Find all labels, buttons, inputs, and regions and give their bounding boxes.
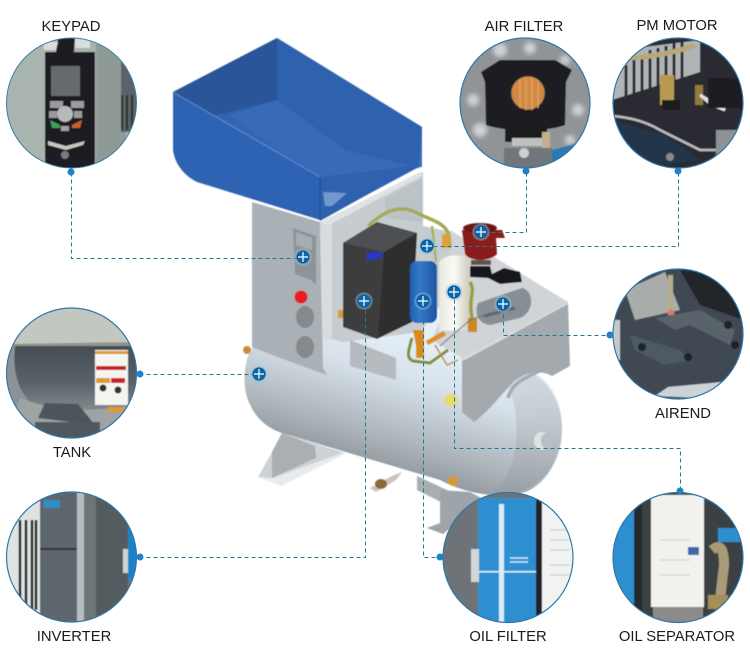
right foot: [417, 476, 485, 534]
red stop button: [294, 290, 308, 304]
tank connector dot: [136, 370, 144, 378]
keypad recess: [293, 228, 316, 285]
white oil separator: [439, 255, 469, 331]
hinge bar: [321, 172, 422, 226]
tank body: [245, 300, 562, 495]
blue top hood: [173, 38, 422, 221]
control cabinet left panel: [252, 202, 327, 375]
air filter label: AIR FILTER: [485, 19, 563, 35]
panel: tank: [6, 308, 144, 461]
keypad label: KEYPAD: [42, 19, 100, 35]
air filter housing red: [462, 223, 505, 265]
machine deck: [432, 230, 568, 358]
cabinet side panel: [320, 172, 451, 342]
left foot: [258, 433, 345, 486]
keypad photo: [6, 38, 137, 176]
panel: inverter: [6, 492, 144, 645]
air filter photo: [460, 38, 591, 174]
oil separator connector dot: [676, 488, 684, 494]
panel: air filter: [460, 19, 591, 174]
inverter photo: [6, 492, 144, 623]
yellow cap: [444, 394, 458, 406]
airend connector dot: [606, 332, 614, 338]
keypad connector dot: [68, 168, 74, 176]
air compressor illustration: [173, 38, 570, 534]
airend photo: [606, 268, 744, 400]
panel: oil filter: [436, 492, 574, 645]
PM motor photo: [612, 38, 744, 174]
inverter label: INVERTER: [37, 629, 111, 645]
inverter connector dot: [136, 554, 144, 560]
connector lines: [72, 172, 680, 558]
grey panel buttons: [296, 306, 314, 358]
black motor parts: [470, 266, 522, 284]
tank right end cap: [490, 366, 562, 495]
oil separator photo: [612, 488, 744, 623]
right front guard plate: [462, 302, 570, 422]
panel: keypad: [6, 19, 137, 176]
airend label: AIREND: [655, 406, 711, 422]
hotspot markers: [250, 223, 512, 383]
PM motor label: PM MOTOR: [636, 18, 718, 34]
tank handle: [508, 366, 550, 398]
oil separator label: OIL SEPARATOR: [619, 629, 735, 645]
lower shroud: [350, 340, 396, 380]
panel: airend: [606, 268, 744, 422]
panel: PM motor: [612, 18, 744, 174]
panel: oil separator: [612, 488, 744, 645]
orange fittings and pipes: [338, 310, 458, 365]
tank end port: [534, 432, 553, 450]
PM motor connector dot: [674, 168, 682, 174]
green pipe: [368, 209, 450, 248]
inverter box: [343, 222, 417, 339]
oil filter photo: [436, 492, 574, 623]
tank label: TANK: [53, 445, 91, 461]
oil filter label: OIL FILTER: [469, 629, 547, 645]
tank photo: [6, 308, 144, 440]
blue oil filter: [410, 261, 437, 323]
drain valve: [243, 346, 458, 492]
PM motor: [476, 288, 531, 325]
air filter connector dot: [522, 168, 530, 174]
oil filter connector dot: [436, 554, 444, 560]
green pipe lower: [470, 282, 472, 322]
